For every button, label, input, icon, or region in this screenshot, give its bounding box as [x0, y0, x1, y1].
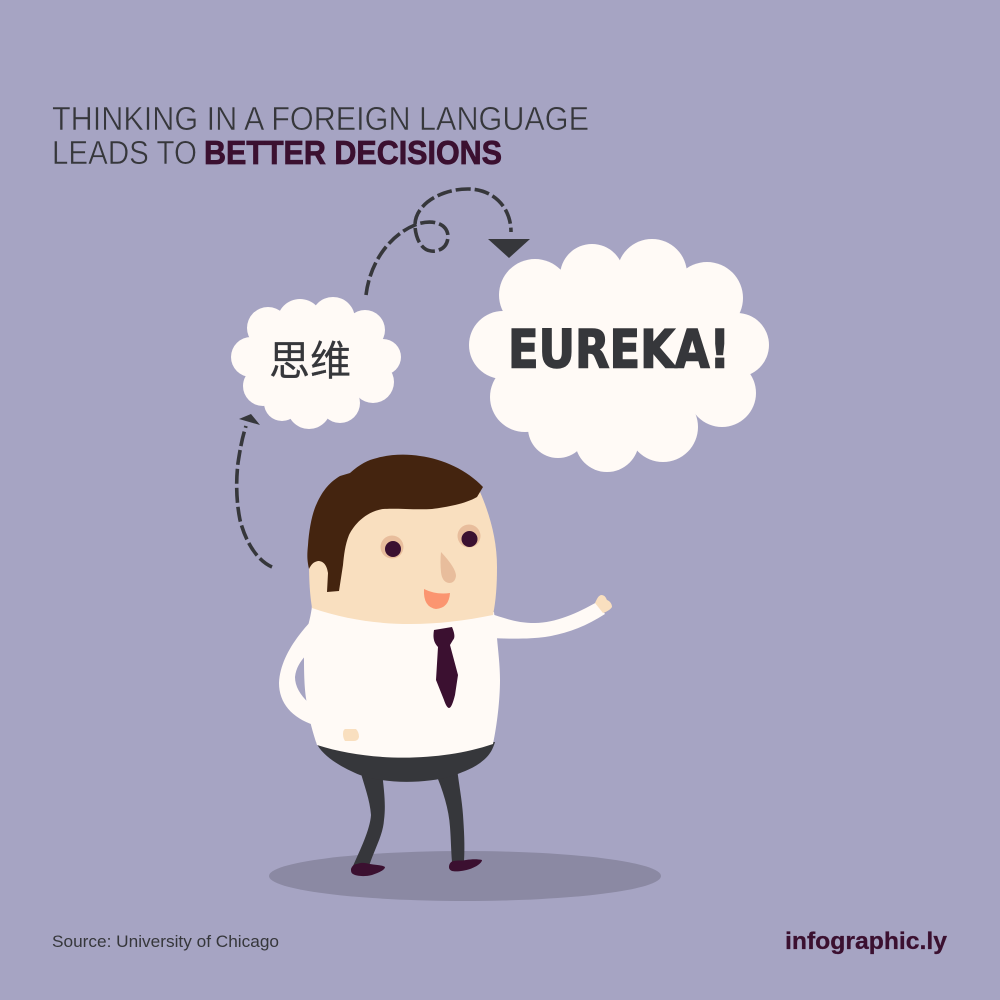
title: BETTER DECISIONS — [204, 135, 502, 172]
head — [309, 467, 497, 624]
right arm — [488, 602, 605, 639]
legs — [353, 768, 464, 866]
ground shadow — [269, 851, 661, 901]
title: LEADS TO — [52, 135, 197, 172]
eyes — [380, 524, 480, 558]
mouth — [424, 589, 450, 609]
left arm — [279, 620, 314, 725]
left hand — [343, 729, 359, 741]
source note: Source: University of Chicago — [52, 932, 279, 951]
right hand — [595, 595, 612, 613]
large eureka cloud — [469, 239, 769, 472]
trousers — [316, 742, 495, 782]
arrow: looping arc to eureka cloud — [366, 189, 530, 295]
character — [279, 455, 612, 876]
eureka label: EUREKA! — [508, 320, 730, 380]
brand logo: infographic.ly — [785, 928, 947, 955]
shoes — [351, 859, 482, 876]
arrow: up to small cloud — [237, 414, 272, 567]
small thought cloud — [231, 297, 401, 429]
chinese word: 思维 — [269, 327, 351, 387]
nose — [440, 552, 456, 583]
shirt body — [304, 606, 500, 758]
title: THINKING IN A FOREIGN LANGUAGE — [52, 101, 589, 138]
tie — [433, 627, 458, 708]
title — [52, 101, 589, 172]
hair — [307, 455, 483, 592]
